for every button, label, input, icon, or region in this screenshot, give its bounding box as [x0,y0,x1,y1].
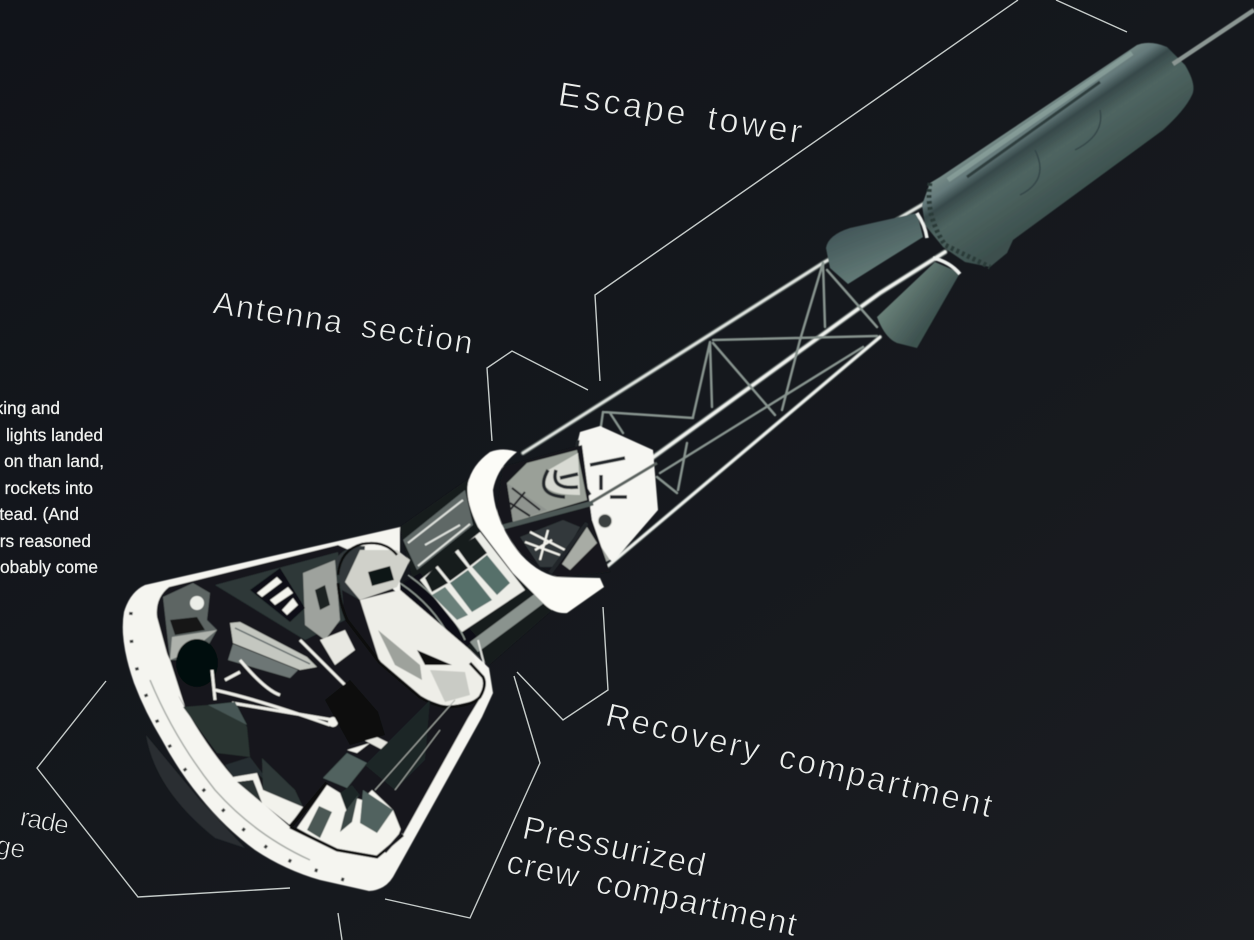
bottom equipment [297,785,403,857]
leader: recovery compartment [517,607,608,720]
label: pressurized: Pressurized [520,809,709,884]
neck section [385,478,552,668]
label: crew compartment: crew compartment [503,843,800,940]
leader: bottom stub [338,913,342,940]
capsule shell [123,527,493,891]
body text fragment: tead. (And [0,504,79,524]
wiring [212,640,360,725]
body text fragment: on than land, [4,451,104,471]
escape rocket body [922,43,1193,267]
label: recovery compartment: Recovery compartment [602,696,996,824]
lower grey blocks [183,703,250,757]
label: upgrade fragment: rade [18,801,72,840]
battery stacks [250,568,305,622]
escape rod [1173,10,1254,64]
white fairing blob [575,426,658,572]
heat shield shadow [146,735,245,848]
body text fragment: rockets into [5,478,93,498]
leader: heat shield [37,681,290,897]
body text fragment: lights landed [6,425,103,445]
leader: pressurized crew compartment [385,676,540,918]
capsule cavity [157,545,482,857]
body text fragment: rs reasoned [0,531,91,551]
label: escape tower: Escape tower [556,75,805,151]
upper wall [215,552,345,640]
porthole assembly [335,546,365,600]
hatch region [360,590,485,707]
escape rocket nozzles [826,213,960,348]
capsule interior details [157,543,485,857]
upper right equipment [303,560,340,640]
upper section interior [497,445,610,577]
instrument panel [230,622,317,670]
left wall panels [163,583,217,660]
leader: escape tower [595,0,1127,381]
leader: antenna section [487,351,588,441]
tower truss [523,203,945,570]
shell rivets and seam [130,612,350,882]
white ring [467,450,604,613]
label: antenna section: Antenna section [211,284,475,361]
window panels [420,532,525,632]
body text fragment [0,398,104,577]
